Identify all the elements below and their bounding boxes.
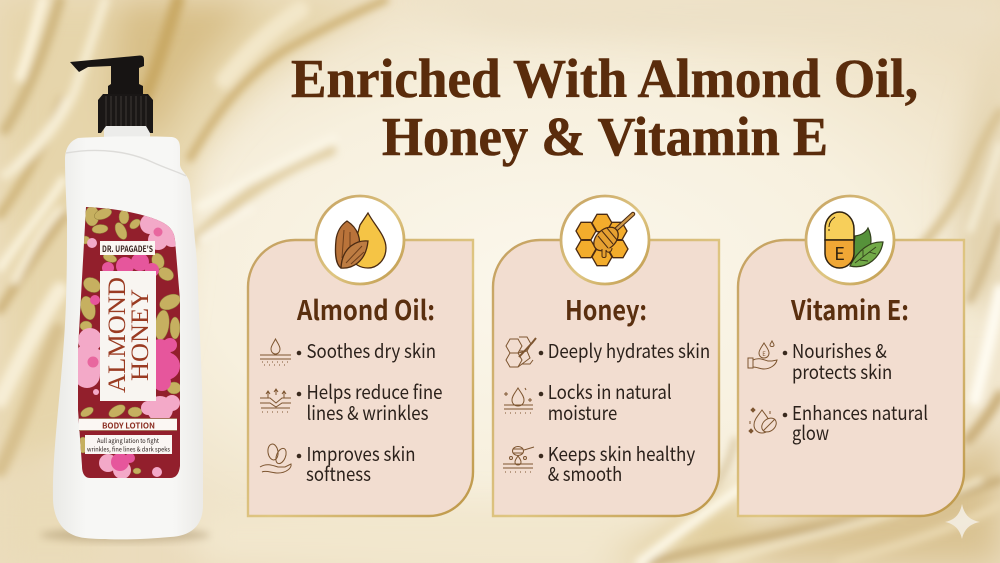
leaves [78,206,183,474]
benefit: improves skin softness: Improves skin [306,440,416,467]
benefit: improves skin softness: softness [306,460,371,487]
bottle label: BODY LOTION [102,420,155,432]
bottle label: Aull aging lation to fight [97,435,159,445]
tan folds [85,0,178,190]
benefit: locks in natural moisture: moisture [548,399,617,426]
benefit: keeps skin healthy and smooth: Keeps skin healthy [548,440,695,467]
panel card [493,240,719,516]
flowers [74,214,181,479]
icon: honeycomb outline [506,337,536,367]
benefit: nourishes and protects skin [783,337,892,385]
heading: honey: Honey: [565,289,647,328]
panel: honey [493,196,719,516]
benefit: nourishes and protects skin: protects skin [792,358,892,385]
icon: drop on skin [260,339,291,365]
label name box [100,271,156,401]
icon: almond and oil drop badge [316,196,404,284]
icon: hand with vitamin drop: E [762,349,766,358]
label brand box [100,241,155,255]
benefit: keeps skin healthy and smooth [539,440,695,487]
title: Enriched With Almond Oil, [291,48,918,109]
icon: hand with almonds [260,443,291,473]
bottle shadow [40,528,210,542]
benefit: enhances natural glow: Enhances natural [792,399,928,426]
icon: vitamin e capsule badge: E [834,240,845,266]
panel card [248,240,473,516]
icon: sparkle [945,504,980,539]
benefit: helps reduce fine lines and wrinkles: Helps reduce fine [306,378,442,405]
benefit: helps reduce fine lines and wrinkles [297,378,442,426]
panel: vitamin e [738,196,964,516]
benefit: improves skin softness [297,440,416,487]
label: body lotion band [79,418,177,431]
benefit: locks in natural moisture [539,378,672,426]
panel card [738,240,964,516]
icon: glowing drop with leaf [749,408,779,435]
product: lotion bottle [40,56,210,542]
label: product name: ALMOND [104,277,131,393]
icon: hand with vitamin drop [748,341,777,369]
bottle label [74,205,183,480]
heading: vitamin e: Vitamin E: [790,289,909,328]
title: Honey & Vitamin E [382,106,828,167]
benefit: enhances natural glow [783,399,928,446]
benefit: keeps skin healthy and smooth: & smooth [548,460,622,487]
label: product name: HONEY [127,289,154,381]
icon: wrinkle reduction [260,389,291,412]
benefit: nourishes and protects skin: Nourishes & [792,337,887,364]
title [291,48,918,167]
icon: honeycomb and dipper badge [561,196,649,284]
benefit: deeply hydrates skin: Deeply hydrates skin [548,337,710,364]
light folds [20,0,43,77]
label: tagline [85,435,172,454]
benefit: helps reduce fine lines and wrinkles: lines & wrinkles [306,399,429,426]
benefit: enhances natural glow: glow [792,419,829,446]
icon: honey dipper on skin [503,446,534,472]
bottle body [53,136,203,539]
panel: almond oil [248,196,473,516]
heading: almond oil: Almond Oil: [296,289,435,328]
label: brand: DR. UPAGADE'S [102,243,153,255]
benefit: soothes dry skin: Soothes dry skin [306,337,436,364]
bottle pump [70,56,153,139]
icon: vitamin e capsule badge [806,196,894,284]
label: product name [104,277,154,393]
bottle label: wrinkles, fine lines & dark speks [87,444,170,454]
benefit: locks in natural moisture: Locks in natural [548,378,672,405]
icon: moisture drop [504,388,533,413]
